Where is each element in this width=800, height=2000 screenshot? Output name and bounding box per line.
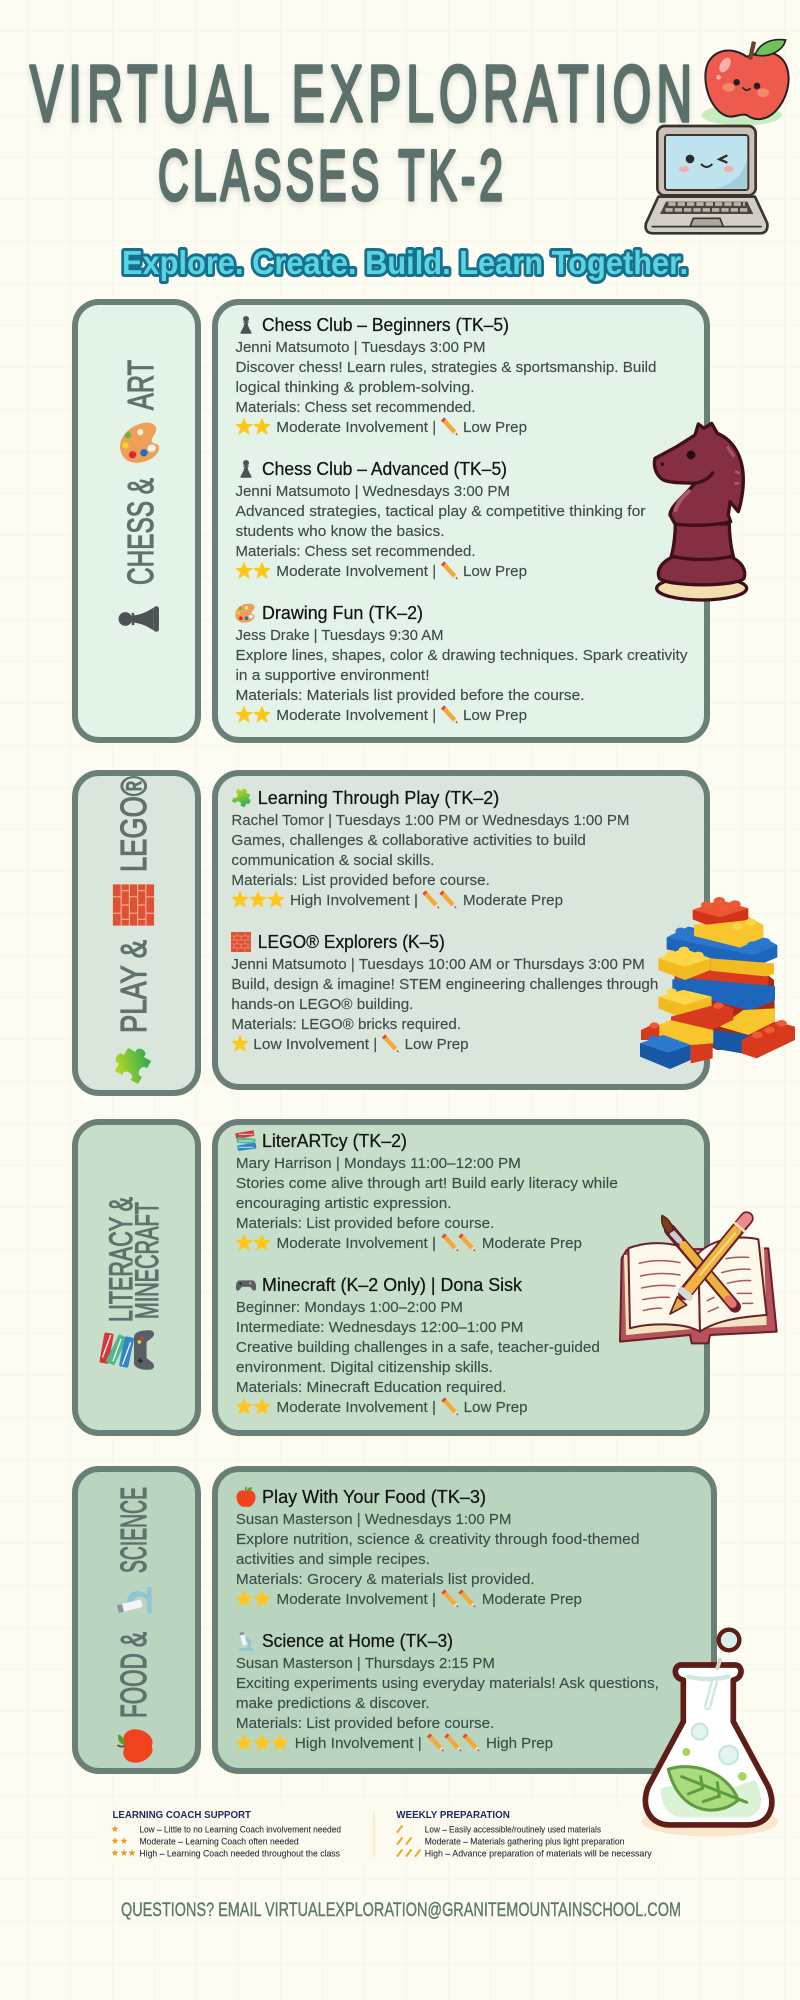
sidebar label: LEGO: LEGO® — [113, 776, 154, 872]
rating — [235, 1590, 582, 1608]
class details: Susan Masterson | Wednesdays 1:00 PM — [236, 1511, 511, 1528]
illustration: flask with leaf — [642, 1630, 778, 1837]
title — [30, 50, 692, 216]
class: Chess Club Advanced — [235, 458, 646, 580]
class details: logical thinking & problem-solving. — [236, 379, 474, 396]
legend: learning coach support: LEARNING COACH SUPPORT — [112, 1809, 252, 1821]
class: Minecraft — [235, 1274, 600, 1416]
class details — [236, 1299, 600, 1396]
legend: weekly preparation: Low – Easily accessible/routinely used materials — [425, 1824, 601, 1834]
class title: Drawing Fun (TK–2) — [262, 602, 423, 623]
rating: Moderate Prep — [482, 1235, 582, 1252]
class details: Materials: Chess set recommended. — [236, 543, 476, 560]
class title: LiterARTcy (TK–2) — [262, 1130, 407, 1151]
sidebar icon: palette — [116, 421, 162, 466]
rating — [235, 418, 527, 436]
sidebar label: LITERACY &: LITERACY & — [103, 1197, 139, 1322]
legend: learning coach support: Moderate – Learning Coach often needed — [139, 1836, 299, 1846]
panel: chess and art classes — [215, 302, 707, 740]
legend: learning coach support: Low – Little to no Learning Coach involvement needed — [139, 1824, 341, 1834]
sidebar icon: brick — [113, 884, 154, 926]
sidebar label: MINECRAFT: MINECRAFT — [129, 1202, 165, 1319]
legend: weekly preparation: High – Advance preparation of materials will be necessary — [425, 1848, 652, 1858]
panel: food and science classes — [215, 1469, 714, 1771]
legend: weekly preparation — [396, 1809, 652, 1858]
class details: Mary Harrison | Mondays 11:00–12:00 PM — [236, 1155, 521, 1172]
tagline: Explore. Create. Build. Learn Together. — [122, 244, 688, 281]
class details: Materials: List provided before course. — [236, 1215, 494, 1232]
class details: Intermediate: Wednesdays 12:00–1:00 PM — [236, 1319, 523, 1336]
rating: Moderate Involvement | — [276, 1235, 436, 1252]
class details: Materials: Grocery & materials list provided. — [236, 1571, 535, 1588]
panel: play and lego sidebar — [75, 773, 198, 1093]
class details: encouraging artistic expression. — [236, 1195, 452, 1212]
rating: Moderate Involvement | — [276, 563, 436, 580]
class details: environment. Digital citizenship skills. — [236, 1359, 493, 1376]
class details — [231, 812, 629, 889]
icon: apple — [236, 1487, 256, 1507]
rating: Moderate Involvement | — [276, 419, 436, 436]
class details: activities and simple recipes. — [236, 1551, 430, 1568]
icon: laptop character — [646, 126, 767, 233]
class details: Advanced strategies, tactical play & competitive thinking for — [236, 503, 646, 520]
icon: microscope — [239, 1632, 254, 1651]
panel: literacy and minecraft sidebar — [75, 1122, 198, 1433]
rating: Moderate Involvement | — [276, 1399, 436, 1416]
sidebar icon: books — [94, 1328, 138, 1372]
class details: Build, design & imagine! STEM engineering challenges through — [231, 976, 658, 993]
legend: learning coach support: High – Learning Coach needed throughout the class — [139, 1848, 340, 1858]
class details: make predictions & discover. — [236, 1695, 430, 1712]
rating — [235, 562, 527, 580]
class details: Creative building challenges in a safe, teacher-guided — [236, 1339, 600, 1356]
class details: Discover chess! Learn rules, strategies & sportsmanship. Build — [236, 359, 656, 376]
illustration: chess knight — [654, 423, 747, 600]
class details: Materials: Chess set recommended. — [236, 399, 476, 416]
class title: Learning Through Play (TK–2) — [258, 787, 499, 808]
title: VIRTUAL EXPLORATION — [30, 50, 692, 139]
class details: Materials: List provided before course. — [231, 872, 490, 889]
class details — [236, 1655, 659, 1732]
legend: weekly preparation: Moderate – Materials gathering plus light preparation — [425, 1836, 624, 1846]
class title: Play With Your Food (TK–3) — [262, 1486, 486, 1507]
class details — [236, 627, 688, 704]
sidebar icon: controller — [134, 1330, 154, 1370]
class details: Beginner: Mondays 1:00–2:00 PM — [236, 1299, 463, 1316]
class details — [236, 339, 656, 416]
class details: Exciting experiments using everyday materials! Ask questions, — [236, 1675, 659, 1692]
class details — [231, 956, 658, 1033]
rating: Low Involvement | — [253, 1036, 377, 1053]
icon: books — [235, 1130, 256, 1151]
sidebar icon: microscope — [117, 1587, 152, 1613]
panel: chess and art sidebar — [75, 302, 198, 740]
class title: Chess Club – Beginners (TK–5) — [262, 314, 509, 335]
sidebar label: FOOD &: FOOD & — [113, 1632, 154, 1718]
rating — [235, 706, 527, 724]
class details: Susan Masterson | Thursdays 2:15 PM — [236, 1655, 495, 1672]
sidebar icon: apple — [117, 1729, 153, 1763]
class details: Jenni Matsumoto | Tuesdays 10:00 AM or Thursdays 3:00 PM — [231, 956, 645, 973]
rating: Low Prep — [463, 563, 527, 580]
panel: food and science sidebar — [75, 1469, 198, 1771]
class details — [236, 1155, 618, 1232]
icon: controller — [236, 1280, 256, 1291]
class title: Chess Club – Advanced (TK–5) — [262, 458, 507, 479]
rating: High Prep — [486, 1735, 553, 1752]
class details: Materials: LEGO® bricks required. — [231, 1016, 461, 1033]
legend: weekly preparation: WEEKLY PREPARATION — [396, 1809, 510, 1821]
class details: hands-on LEGO® building. — [231, 996, 413, 1013]
rating: Low Prep — [463, 707, 527, 724]
icon: brick — [231, 932, 251, 952]
sidebar label: CHESS &: CHESS & — [120, 478, 161, 585]
class details: Rachel Tomor | Tuesdays 1:00 PM or Wednesdays 1:00 PM — [231, 812, 629, 829]
rating: Low Prep — [464, 1399, 528, 1416]
class details — [236, 483, 646, 560]
sidebar label: ART: ART — [120, 360, 161, 410]
icon: pawn — [240, 460, 252, 478]
panel: play and lego classes — [215, 773, 707, 1087]
rating: Moderate Prep — [463, 892, 563, 909]
rating: Moderate Prep — [482, 1591, 582, 1608]
legend: learning coach support — [112, 1809, 341, 1858]
icon: pawn — [240, 316, 252, 334]
rating — [231, 890, 563, 909]
rating: High Involvement | — [295, 1735, 422, 1752]
legend — [100, 1805, 667, 1862]
class title: Science at Home (TK–3) — [262, 1630, 453, 1651]
rating — [235, 1398, 528, 1416]
panel: literacy and minecraft classes — [215, 1122, 707, 1433]
title: CLASSES TK-2 — [158, 137, 503, 216]
class: Drawing Fun — [235, 602, 688, 724]
rating — [231, 1034, 469, 1053]
class details: Explore lines, shapes, color & drawing techniques. Spark creativity — [236, 647, 688, 664]
class: LiterARTcy — [235, 1130, 618, 1252]
class details: Materials: Materials list provided before the course. — [236, 687, 584, 704]
class title: LEGO® Explorers (K–5) — [258, 931, 445, 952]
class details: Jenni Matsumoto | Tuesdays 3:00 PM — [236, 339, 486, 356]
class title: Minecraft (K–2 Only) | Dona Sisk — [262, 1274, 523, 1295]
rating: Low Prep — [463, 419, 527, 436]
rating: Low Prep — [405, 1036, 469, 1053]
class details: Jenni Matsumoto | Wednesdays 3:00 PM — [236, 483, 510, 500]
icon: puzzle — [232, 786, 254, 809]
class details: Explore nutrition, science & creativity through food-themed — [236, 1531, 640, 1548]
class: Science at Home — [235, 1630, 659, 1752]
rating: High Involvement | — [290, 892, 418, 909]
class: Play With Your Food — [235, 1486, 640, 1608]
class: Chess Club Beginners — [235, 314, 656, 436]
class details — [236, 1511, 640, 1588]
rating — [235, 1234, 582, 1252]
sidebar label: PLAY &: PLAY & — [113, 940, 154, 1033]
class details: Games, challenges & collaborative activities to build — [231, 832, 586, 849]
sidebar label: SCIENCE: SCIENCE — [113, 1487, 154, 1573]
rating — [235, 1734, 553, 1752]
rating: Moderate Involvement | — [276, 1591, 436, 1608]
class: LEGO Explorers — [231, 931, 658, 1053]
class details: Stories come alive through art! Build early literacy while — [236, 1175, 618, 1192]
class: Learning Through Play — [231, 786, 629, 909]
illustration: open book with pencil and brush — [620, 1215, 777, 1343]
class details: students who know the basics. — [236, 523, 444, 540]
class details: Materials: List provided before course. — [236, 1715, 494, 1732]
class details: Materials: Minecraft Education required. — [236, 1379, 506, 1396]
icon: palette — [235, 604, 255, 623]
sidebar icon: pawn — [119, 606, 159, 632]
class details: Jess Drake | Tuesdays 9:30 AM — [236, 627, 444, 644]
illustration: lego tower — [640, 897, 795, 1069]
class details: communication & social skills. — [231, 852, 434, 869]
sidebar icon: puzzle — [110, 1040, 154, 1084]
rating: Moderate Involvement | — [276, 707, 436, 724]
icon: apple character — [702, 40, 789, 126]
class details: in a supportive environment! — [236, 667, 430, 684]
